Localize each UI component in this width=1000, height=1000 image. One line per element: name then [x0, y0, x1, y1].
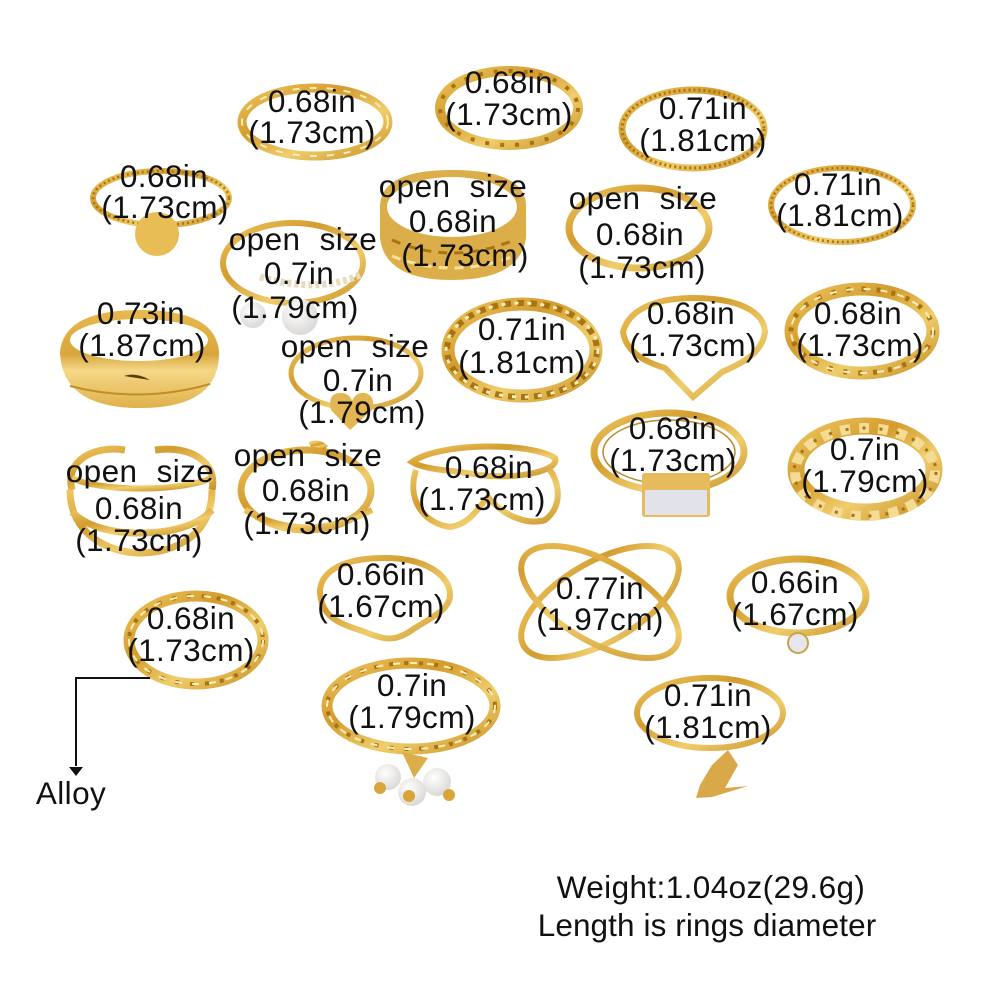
ring: disc charm	[93, 171, 229, 256]
label: ring 14: open size	[66, 453, 214, 489]
label: ring 6: (1.73cm)	[401, 237, 529, 273]
label: ring 10	[281, 328, 429, 430]
label: ring 3: 0.71in	[659, 90, 747, 126]
ring: twisted band top centre	[440, 71, 578, 145]
ring: double open band	[70, 449, 213, 553]
label: ring 1: 0.68in	[268, 83, 356, 119]
label: ring 21: 0.66in	[751, 564, 839, 600]
label: ring 19: (1.67cm)	[317, 588, 445, 624]
label: ring 5: (1.81cm)	[776, 197, 904, 233]
label: ring 4	[101, 158, 229, 225]
size labels	[66, 64, 929, 745]
ring: double V band	[412, 446, 558, 527]
label: ring 5	[776, 166, 904, 233]
label: ring 12: (1.73cm)	[629, 327, 757, 363]
label: ring 12: 0.68in	[647, 295, 735, 331]
ring: beaded thin right	[771, 168, 913, 242]
label: ring 11: (1.81cm)	[458, 344, 586, 380]
label: ring 16: 0.68in	[445, 449, 533, 485]
label: ring 12	[629, 295, 757, 363]
ring: round crystal solitaire	[730, 559, 866, 653]
label: ring 13	[796, 295, 924, 363]
label: ring 6: open size	[379, 168, 527, 204]
ring: beaded wide ring	[446, 303, 598, 397]
label: ring 2: (1.73cm)	[445, 96, 573, 132]
label: ring 22: 0.68in	[147, 600, 235, 636]
label: ring 4: (1.73cm)	[101, 189, 229, 225]
label: ring 18: 0.7in	[830, 431, 900, 467]
label: ring 17: (1.73cm)	[609, 442, 737, 478]
label: ring 3	[639, 90, 767, 158]
ring: open band with crystals and pearls	[223, 223, 363, 335]
ring: braided band	[129, 596, 263, 684]
ring: wavy band top left	[242, 88, 388, 156]
label: ring 18	[801, 431, 929, 499]
label: ring 6: 0.68in	[409, 203, 497, 239]
label: ring 21: (1.67cm)	[731, 596, 859, 632]
label: ring 14: (1.73cm)	[75, 522, 203, 558]
label: ring 20: 0.77in	[556, 570, 644, 606]
ring: leaf crystal band	[794, 426, 936, 516]
label: ring 11: 0.71in	[478, 311, 566, 347]
ring: domed band	[60, 310, 219, 408]
label: ring 15: 0.68in	[262, 472, 350, 508]
label: ring 23	[348, 667, 476, 735]
ring: rectangular crystal	[594, 413, 744, 517]
label: ring 21	[731, 564, 859, 632]
label: ring 20	[536, 570, 664, 637]
label: ring 14	[66, 453, 214, 558]
label: ring 14: 0.68in	[95, 490, 183, 526]
label: ring 17: 0.68in	[629, 410, 717, 446]
label: ring 19	[317, 556, 445, 624]
label: ring 10: 0.7in	[323, 362, 393, 398]
label: ring 7	[569, 180, 717, 285]
label: ring 4: 0.68in	[120, 158, 208, 194]
label: ring 16: (1.73cm)	[418, 481, 546, 517]
text block: weight and length note: Weight:1.04oz(29.6g)	[557, 869, 865, 905]
ring: rope twist right	[791, 289, 933, 373]
ring: crossed bands	[504, 523, 696, 681]
label: ring 17	[609, 410, 737, 478]
label: ring 7: 0.68in	[596, 216, 684, 252]
label: ring 1	[248, 83, 376, 150]
ring: wavy band	[320, 558, 450, 638]
ring: open thin band	[569, 188, 709, 268]
label: ring 9: (1.87cm)	[78, 327, 206, 363]
label: ring 7: open size	[569, 180, 717, 216]
label: ring 2	[445, 64, 573, 132]
label: ring 8: (1.79cm)	[231, 289, 359, 325]
label: ring 22: (1.73cm)	[127, 632, 255, 668]
text block: weight and length note	[538, 869, 876, 943]
label: alloy: Alloy	[36, 775, 106, 811]
label: ring 9	[78, 295, 206, 363]
label: ring 5: 0.71in	[794, 166, 882, 202]
label: ring 2: 0.68in	[465, 64, 553, 100]
ring: beaded thin top right	[622, 90, 764, 168]
label: ring 23: 0.7in	[377, 667, 447, 703]
label: ring 11	[458, 311, 586, 380]
label: ring 20: (1.97cm)	[536, 601, 664, 637]
label: ring 10: open size	[281, 328, 429, 364]
rings collection	[60, 71, 936, 806]
label: ring 15: open size	[234, 437, 382, 473]
label: ring 8: 0.7in	[264, 255, 334, 291]
ring: butterfly charm	[637, 678, 783, 798]
label: ring 7: (1.73cm)	[578, 249, 706, 285]
label: ring 8: open size	[229, 221, 377, 257]
callout: alloy arrow line	[69, 678, 150, 776]
label: ring 16	[418, 449, 546, 517]
ring: double open heart band	[241, 444, 372, 530]
label: ring 1: (1.73cm)	[248, 114, 376, 150]
label: ring 19: 0.66in	[337, 556, 425, 592]
label: ring 23: (1.79cm)	[348, 699, 476, 735]
ring: V heart band	[623, 298, 765, 397]
ring: wide open textured band	[380, 170, 526, 280]
label: ring 9: 0.73in	[97, 295, 185, 331]
label: ring 24: 0.71in	[664, 677, 752, 713]
label: ring 3: (1.81cm)	[639, 122, 767, 158]
label: ring 8	[229, 221, 377, 325]
label: ring 22	[127, 600, 255, 668]
label: ring 13: 0.68in	[814, 295, 902, 331]
label: ring 15	[234, 437, 382, 541]
text block: weight and length note: Length is rings diameter	[538, 907, 876, 943]
ring: heart charm	[291, 338, 421, 430]
label: ring 6	[379, 168, 529, 273]
label: ring 10: (1.79cm)	[298, 394, 426, 430]
ring: twisted band with pearl charms	[327, 663, 495, 806]
label: ring 13: (1.73cm)	[796, 327, 924, 363]
label: ring 18: (1.79cm)	[801, 463, 929, 499]
label: ring 15: (1.73cm)	[243, 505, 371, 541]
label: ring 24: (1.81cm)	[644, 709, 772, 745]
label: ring 24	[644, 677, 772, 745]
